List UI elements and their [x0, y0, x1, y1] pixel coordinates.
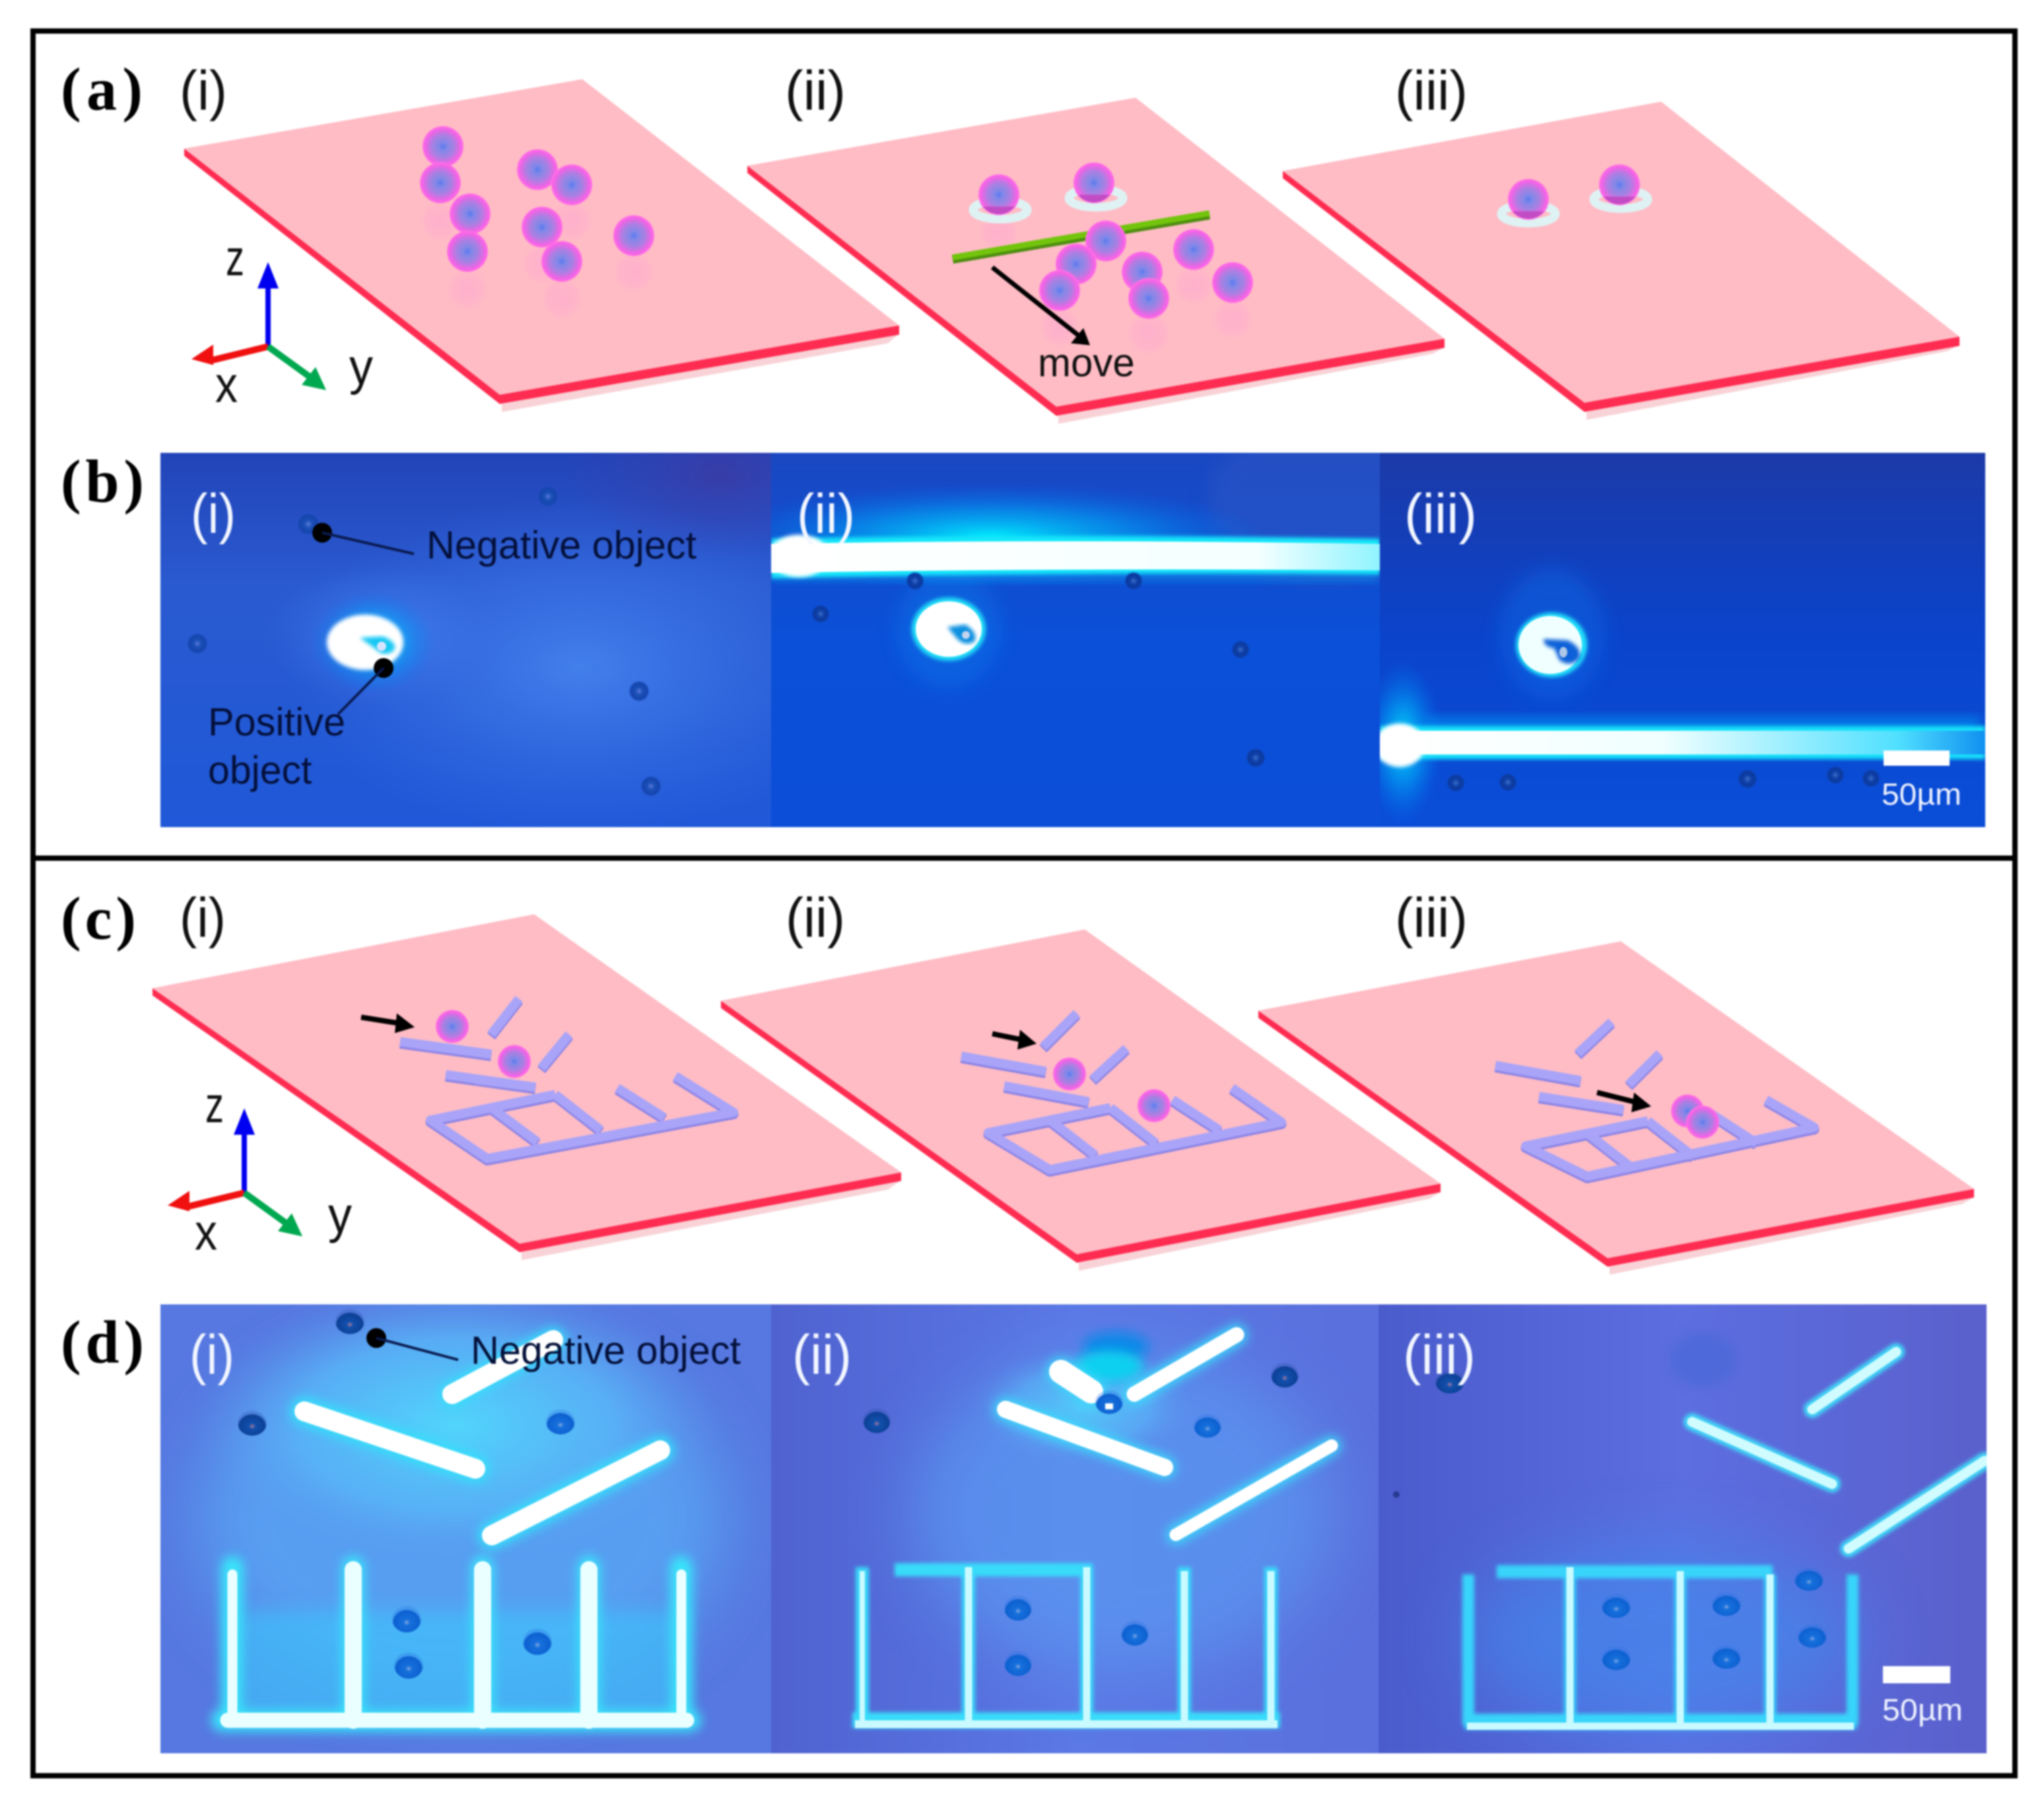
photo: b iii	[1363, 453, 1985, 827]
text: move: move	[1038, 341, 1135, 385]
rods: d i	[304, 1340, 660, 1535]
spheres: a iii	[1508, 164, 1640, 220]
beads: b i	[187, 486, 662, 797]
structure shadow: c iii	[1495, 1024, 1814, 1178]
heading: c: (c)	[61, 885, 136, 952]
axes: a: z	[226, 230, 244, 286]
structure: c ii	[961, 1013, 1281, 1170]
photo: b ii	[770, 452, 1381, 828]
arrow: c ii	[992, 1030, 1037, 1050]
beads: b iii	[1447, 766, 1880, 792]
label: d i: (i)	[189, 1324, 234, 1386]
heading: d: (d)	[61, 1308, 144, 1376]
callout: negative object	[312, 523, 697, 567]
panel: d	[61, 1281, 1987, 1753]
plate: c iii	[1258, 941, 1974, 1275]
label: c iii: (iii)	[1395, 887, 1468, 949]
plate: a i	[184, 79, 899, 412]
callout: negative object: Negative object	[426, 523, 697, 567]
plate: a iii	[1283, 102, 1959, 420]
sphere bases: a ii	[983, 195, 1110, 214]
callout: positive object	[208, 658, 393, 792]
scale bar: b	[1882, 751, 1961, 811]
rings: a iii	[1501, 190, 1648, 223]
spheres: a i	[420, 126, 654, 282]
callout: negative object d: Negative object	[471, 1329, 741, 1372]
sphere bases: a iii	[1513, 197, 1635, 218]
scale bar: d: 50µm	[1882, 1693, 1963, 1727]
label: a i: (i)	[180, 59, 227, 121]
comb: d i	[222, 1567, 690, 1720]
label: b ii: (ii)	[797, 483, 855, 545]
rods over spheres: c i	[423, 1045, 535, 1087]
callout: positive object: object	[208, 749, 312, 792]
spheres: a ii	[978, 162, 1253, 319]
arrow: c i	[361, 1013, 415, 1033]
beads: d ii	[863, 1362, 1299, 1676]
scale bar: b: 50µm	[1882, 777, 1961, 811]
structure shadow: c ii	[961, 1015, 1281, 1172]
plate: a ii	[747, 98, 1445, 424]
label: c i: (i)	[180, 887, 226, 949]
axes: a	[191, 230, 373, 413]
label: d iii: (iii)	[1403, 1324, 1476, 1386]
rods: d ii	[1005, 1335, 1332, 1535]
beads: d iii	[1435, 1370, 1827, 1670]
panel: b	[62, 452, 1987, 828]
photo: d i	[160, 1281, 771, 1753]
axes: c: x	[195, 1204, 217, 1261]
axes: a: y	[349, 339, 373, 395]
rods: d iii	[1692, 1352, 1985, 1549]
panel: a	[61, 55, 1959, 424]
axes: c: y	[328, 1187, 352, 1244]
plate: c ii	[721, 929, 1441, 1271]
spheres: c iii	[1671, 1094, 1719, 1139]
heading: b: (b)	[61, 448, 144, 515]
spheres: c i	[436, 1010, 531, 1078]
structure shadow: c i	[400, 1001, 733, 1160]
axes: c	[168, 1077, 352, 1261]
spheres: c ii	[1053, 1058, 1171, 1122]
photo: b i	[159, 452, 772, 828]
axes: c: z	[205, 1077, 224, 1133]
comb: d ii	[852, 1567, 1280, 1724]
beads: b ii	[811, 572, 1266, 768]
photo: d iii	[1379, 1304, 1987, 1753]
heading: a: (a)	[61, 55, 143, 123]
axes: a: x	[215, 356, 238, 413]
arrow: move	[992, 267, 1090, 345]
arrow: c iii	[1597, 1092, 1651, 1112]
label: b iii: (iii)	[1404, 483, 1477, 545]
scale bar: d	[1882, 1666, 1963, 1727]
label: d ii: (ii)	[792, 1324, 852, 1386]
label: a iii: (iii)	[1395, 59, 1468, 121]
label: b i: (i)	[191, 483, 236, 545]
plate: c i	[153, 914, 901, 1260]
callout: positive object: Positive	[208, 700, 345, 744]
rings: a ii	[973, 189, 1123, 219]
photo: d ii	[771, 1304, 1379, 1753]
panel: c	[61, 885, 1974, 1275]
beads: d i	[238, 1309, 575, 1679]
label: a ii: (ii)	[785, 59, 846, 121]
structure: c i	[400, 999, 733, 1159]
structure: c iii	[1495, 1022, 1814, 1176]
fiber: green	[953, 213, 1209, 259]
label: c ii: (ii)	[786, 887, 845, 949]
comb: d iii	[1464, 1567, 1857, 1726]
